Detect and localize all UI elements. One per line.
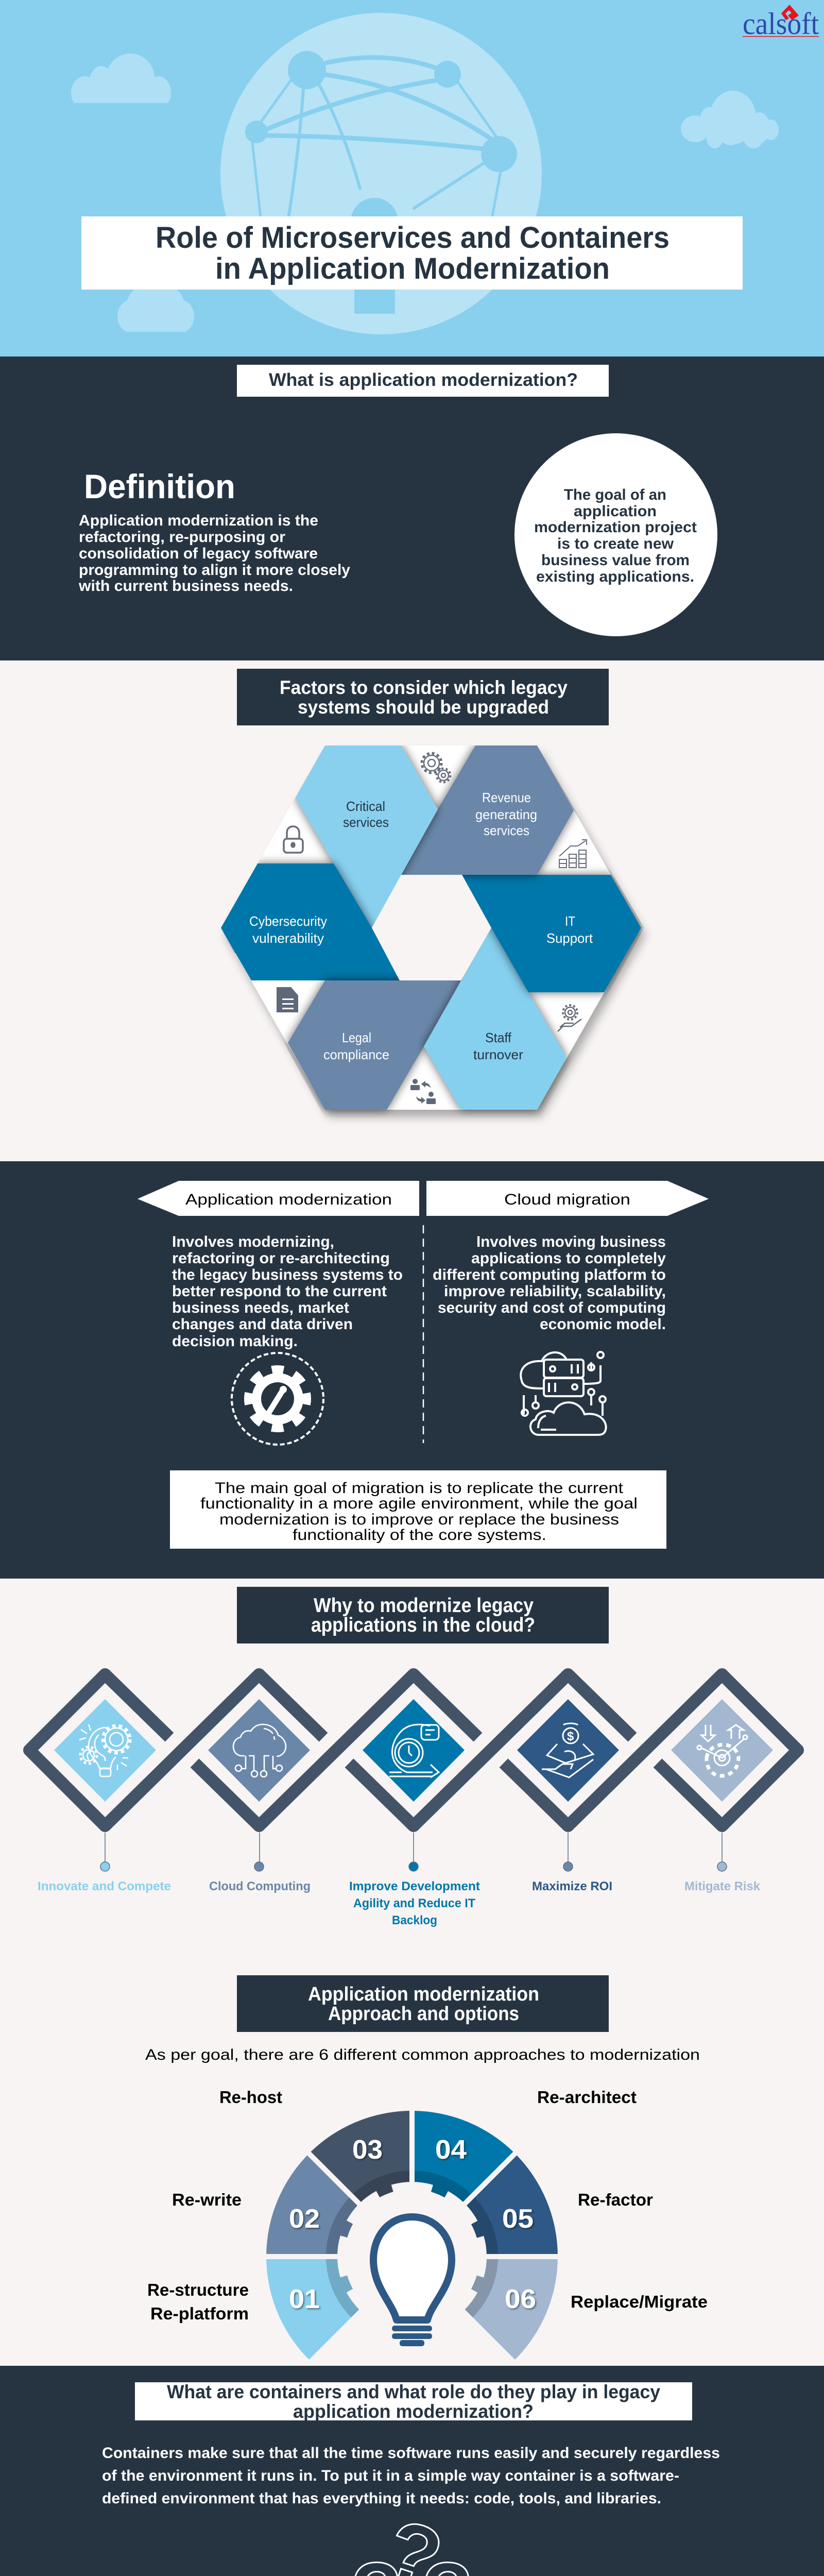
text: containers xyxy=(102,2445,720,2507)
heading: approach and options: Approach and options xyxy=(328,2003,519,2025)
title: Role of Microservices and Containers xyxy=(156,221,670,255)
callout: main goal: functionality in a more agile environment, while the goal xyxy=(200,1495,638,1512)
callout: project goal: The goal of an xyxy=(564,486,666,503)
label: innovate and compete: Innovate and Compete xyxy=(38,1879,171,1893)
callout: project goal: business value from xyxy=(541,552,690,569)
item: improve agility xyxy=(363,1699,465,1802)
text: modernization description: better respond to the current xyxy=(172,1283,387,1300)
arrow: cloud migration xyxy=(426,1181,709,1216)
text: intro to approaches: As per goal, there are 6 different common approaches to modernization xyxy=(145,2046,700,2063)
heading: What is application modernization? xyxy=(269,370,578,390)
callout: project goal: existing applications. xyxy=(536,568,694,585)
text: containers: defined environment that has everything it needs: code, tools, and libraries. xyxy=(102,2490,661,2507)
label: staff turnover: Staff xyxy=(485,1030,512,1045)
icon: light bulb xyxy=(373,2217,452,2346)
text: modernization description: business needs, market xyxy=(172,1299,349,1316)
label: staff turnover xyxy=(473,1030,523,1062)
callout: project goal: application xyxy=(574,503,657,520)
text: modernization description: refactoring or re-architecting xyxy=(172,1250,390,1267)
label: re-structure re-platform: Re-structure xyxy=(147,2280,249,2299)
icon: document xyxy=(277,987,298,1012)
definition text: Application modernization is the xyxy=(79,512,318,529)
text: modernization description xyxy=(172,1233,403,1350)
label: staff turnover: turnover xyxy=(473,1047,523,1062)
label: critical services xyxy=(343,799,389,830)
label: replace migrate: Replace/Migrate xyxy=(571,2292,708,2311)
label: cloud computing: Cloud Computing xyxy=(209,1879,311,1893)
label: it support xyxy=(546,913,593,946)
item: cloud computing xyxy=(208,1699,310,1802)
definition text: refactoring, re-purposing or xyxy=(79,529,285,546)
label: re-architect: Re-architect xyxy=(537,2088,637,2107)
title xyxy=(81,216,743,290)
icon: growth chart xyxy=(559,840,587,868)
icon: gear in hand xyxy=(558,1005,581,1031)
callout: main goal: functionality of the core systems. xyxy=(293,1527,546,1544)
panel: containers and microservices xyxy=(0,2366,824,2576)
title: in Application Modernization xyxy=(215,252,610,285)
callout: project goal: modernization project xyxy=(534,519,697,536)
heading: what are containers: application modernization? xyxy=(293,2401,534,2422)
arrow: application modernization xyxy=(138,1181,419,1216)
text: migration description: different computing platform to xyxy=(433,1266,666,1283)
item: maximize roi xyxy=(517,1699,619,1802)
icon: padlock xyxy=(284,826,303,853)
label: re-factor: Re-factor xyxy=(578,2190,653,2209)
heading: systems should be upgraded xyxy=(298,697,549,718)
heading: why modernize: applications in the cloud? xyxy=(311,1614,535,1636)
item: innovate and compete xyxy=(54,1699,156,1802)
panel: what is application modernization xyxy=(0,357,824,660)
arrow: cloud migration: Cloud migration xyxy=(504,1191,630,1208)
icon: cloud lower left xyxy=(117,290,194,332)
label: cybersecurity vulnerability: Cybersecurity xyxy=(249,913,327,929)
heading: what are containers xyxy=(135,2381,692,2422)
callout: main goal xyxy=(170,1470,666,1549)
label: cybersecurity vulnerability: vulnerability xyxy=(252,930,324,946)
numbers: 03 xyxy=(352,2135,383,2165)
heading: why modernize: Why to modernize legacy xyxy=(314,1595,534,1617)
definition text: consolidation of legacy software xyxy=(79,545,318,562)
label: revenue generating services xyxy=(475,790,537,838)
definition text: with current business needs. xyxy=(78,578,293,595)
heading: why modernize xyxy=(237,1587,609,1643)
heading: Factors to consider which legacy xyxy=(280,677,568,698)
text: containers: of the environment it runs in. To put it in a simple way container is a software- xyxy=(102,2467,679,2484)
label: maximize roi: Maximize ROI xyxy=(532,1879,612,1893)
panel: factors xyxy=(221,669,649,1122)
callout: main goal: modernization is to improve or replace the business xyxy=(219,1511,619,1528)
label: critical services: services xyxy=(343,815,389,830)
heading: what are containers: What are containers and what role do they play in legacy xyxy=(167,2381,660,2402)
label: it support: Support xyxy=(546,930,593,946)
icon: cloud servers xyxy=(521,1352,606,1435)
chart: six approaches bulb xyxy=(263,2107,561,2360)
numbers: 06 xyxy=(505,2284,536,2314)
definition text xyxy=(78,512,350,595)
panel: why modernize and approaches xyxy=(0,1579,824,2576)
numbers xyxy=(289,2135,536,2314)
text: modernization description: the legacy business systems to xyxy=(172,1266,403,1283)
label: it support: IT xyxy=(565,913,575,929)
label: revenue generating services: generating xyxy=(475,807,537,822)
callout: project goal xyxy=(514,433,717,636)
illustration: globe network xyxy=(220,13,542,334)
icon: cloud left xyxy=(71,54,171,103)
text: migration description: economic model. xyxy=(540,1316,666,1333)
callout: main goal: The main goal of migration is to replicate the current xyxy=(215,1480,624,1497)
label: legal compliance: Legal xyxy=(342,1030,371,1045)
panel: modernization vs migration xyxy=(0,1161,824,1579)
label: improve development agility: Improve Development xyxy=(349,1879,480,1893)
text: migration description: applications to completely xyxy=(471,1250,666,1267)
icon: question marks xyxy=(351,2501,473,2576)
label: cybersecurity vulnerability xyxy=(249,913,327,946)
label: critical services: Critical xyxy=(346,799,385,814)
label: improve development agility: Backlog xyxy=(392,1913,437,1927)
icon: gear and wrench xyxy=(232,1353,323,1445)
chart: hexagon of factors xyxy=(221,745,645,1117)
heading xyxy=(237,669,609,725)
label: improve development agility xyxy=(349,1879,480,1927)
label: legal compliance: compliance xyxy=(323,1047,389,1062)
numbers: 02 xyxy=(289,2204,320,2234)
logo: calsoft: calsoft xyxy=(743,7,819,41)
text: modernization description: Involves modernizing, xyxy=(172,1233,334,1250)
item: mitigate risk xyxy=(671,1699,773,1802)
text: containers: Containers make sure that all the time software runs easily and securely regardless xyxy=(102,2445,720,2462)
heading xyxy=(237,365,609,397)
connectors xyxy=(100,1833,727,1871)
panel: hero xyxy=(0,0,824,357)
label: re-write: Re-write xyxy=(172,2190,242,2209)
text: migration description xyxy=(433,1233,666,1333)
heading: approach and options xyxy=(237,1975,609,2032)
label: re-host: Re-host xyxy=(219,2088,282,2107)
label: improve development agility: Agility and Reduce IT xyxy=(353,1896,475,1910)
chart: chain of diamonds xyxy=(29,1674,798,2360)
numbers: 05 xyxy=(502,2204,534,2234)
label: re-structure re-platform: Re-platform xyxy=(150,2304,249,2323)
text: migration description: improve reliability, scalability, xyxy=(444,1283,666,1300)
icon: cloud right xyxy=(681,91,779,148)
text: migration description: Involves moving business xyxy=(476,1233,666,1250)
label: mitigate risk: Mitigate Risk xyxy=(684,1879,761,1893)
item: maximize roi: $ xyxy=(567,1730,574,1743)
arrow: application modernization: Application modernization xyxy=(185,1191,392,1208)
label: legal compliance xyxy=(323,1030,389,1062)
definition text: programming to align it more closely xyxy=(79,562,350,579)
label: revenue generating services: services xyxy=(484,823,529,838)
numbers: 01 xyxy=(289,2284,320,2314)
text: modernization description: changes and data driven xyxy=(172,1316,353,1333)
numbers: 04 xyxy=(435,2135,467,2165)
text: migration description: security and cost of computing xyxy=(438,1299,666,1316)
text: modernization description: decision making. xyxy=(172,1333,298,1350)
icon: staff turnover people xyxy=(410,1079,436,1104)
definition heading: Definition xyxy=(84,467,235,505)
heading: approach and options: Application modernization xyxy=(308,1984,539,2005)
label: re-structure re-platform xyxy=(147,2280,249,2323)
label: revenue generating services: Revenue xyxy=(482,790,531,805)
icon: gears xyxy=(422,753,450,782)
callout: project goal: is to create new xyxy=(557,535,674,552)
